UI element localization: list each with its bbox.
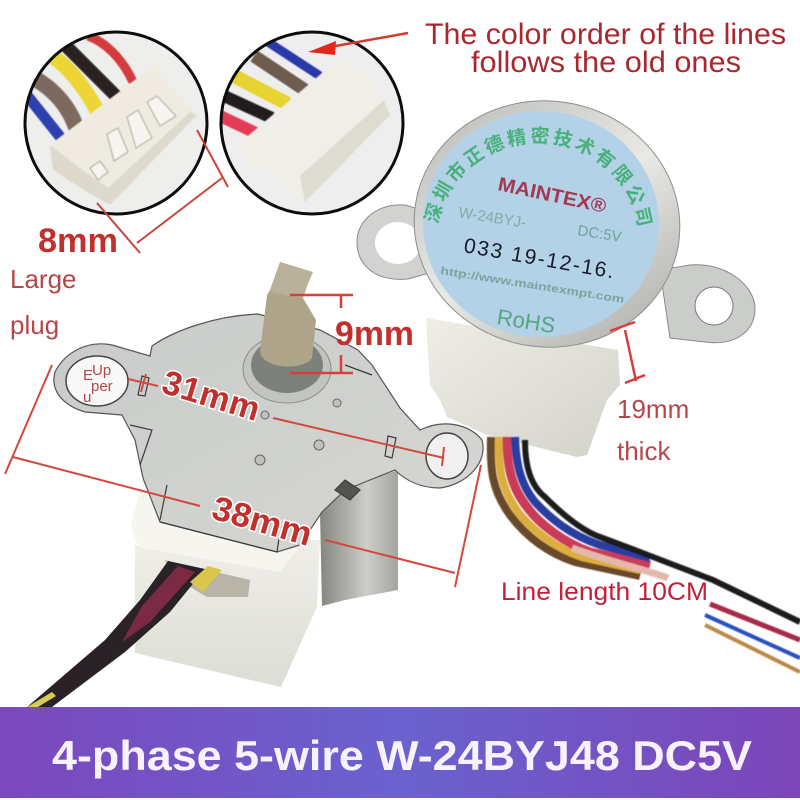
wire: yellow	[52, 56, 98, 112]
can rim	[398, 84, 696, 364]
right ear hole	[426, 433, 468, 479]
wire bundle	[27, 561, 222, 707]
dimension: 19mm thick: 19mm	[617, 394, 689, 424]
plate slots	[130, 365, 396, 552]
dimension: 38mm: 38mm	[208, 489, 316, 554]
small label: upper: per	[91, 378, 113, 395]
wire: blue	[268, 42, 320, 76]
shaft	[260, 262, 316, 367]
dimension: 8mm plug width	[38, 130, 228, 260]
note: color order: The color order of the lines	[425, 18, 786, 51]
connector contacts	[90, 96, 176, 180]
label: date code: 033 19-12-16.	[462, 234, 616, 283]
inset: connector back view	[220, 32, 403, 214]
collar inner ring	[251, 337, 323, 393]
label: company name: 深圳市正德精密技术有限公司	[422, 126, 653, 226]
dimension: 9mm shaft	[290, 295, 414, 373]
small label: upper	[83, 362, 113, 406]
wire window	[165, 560, 250, 597]
motor 2: rear right view	[356, 100, 800, 674]
wire: brown	[34, 78, 77, 130]
base plate	[54, 314, 483, 552]
dimension: 19mm thick	[610, 322, 689, 466]
arrow: to wire colors	[308, 33, 408, 55]
inset: connector front view	[25, 32, 207, 214]
dimension: 9mm shaft: 9mm	[335, 315, 414, 353]
left ear	[357, 205, 440, 279]
small label: upper: E	[83, 367, 93, 384]
dimension: 8mm plug width: 8mm	[38, 222, 118, 260]
wire block	[426, 318, 620, 457]
connector side face	[300, 100, 390, 202]
housing lower face	[50, 112, 197, 205]
shaft flat	[270, 262, 313, 298]
connector housing	[247, 72, 323, 140]
right side metal	[320, 470, 398, 606]
wire: yellow	[234, 76, 288, 104]
label: large plug	[10, 264, 76, 340]
banner title: 4-phase 5-wire W-24BYJ48 DC5V	[52, 732, 752, 779]
label: MAINTEX: MAINTEX®	[496, 173, 609, 218]
right ear hole	[695, 287, 733, 325]
wire: black	[64, 44, 116, 96]
wire: red	[88, 36, 133, 82]
block top rim	[131, 478, 322, 572]
note: color order	[425, 18, 786, 79]
small label: upper: u	[83, 389, 91, 406]
cable bundle	[491, 437, 800, 672]
label: large plug: plug	[10, 310, 59, 340]
rivets	[255, 399, 341, 465]
label: voltage: DC:5V	[576, 222, 623, 246]
motor 1: front view	[27, 262, 483, 707]
note: color order: follows the old ones	[471, 46, 741, 79]
blue label	[423, 111, 659, 337]
label: line length: Line length 10CM	[501, 578, 708, 606]
left ear hole	[375, 222, 421, 264]
dimension: 38mm	[5, 365, 481, 587]
label: RoHS: RoHS	[495, 304, 557, 338]
left ear hole	[66, 356, 128, 406]
wire: blue	[26, 94, 61, 138]
dimension: 31mm: 31mm	[158, 363, 264, 429]
gearbox white block	[135, 540, 320, 687]
dimension: 31mm	[128, 363, 444, 466]
wire: red	[220, 116, 258, 134]
wire: black	[222, 95, 272, 118]
right ear	[660, 265, 755, 343]
wire: brown	[254, 56, 308, 92]
small label: upper: Up	[92, 362, 111, 379]
label: model: W-24BYJ-	[457, 204, 527, 232]
bottom banner	[0, 707, 800, 798]
label: large plug: Large	[10, 264, 76, 294]
dimension: 19mm thick: thick	[617, 436, 671, 466]
label: url: http://www.maintexmpt.com	[440, 265, 625, 306]
connector housing	[51, 65, 194, 188]
shaft collar	[243, 335, 331, 403]
